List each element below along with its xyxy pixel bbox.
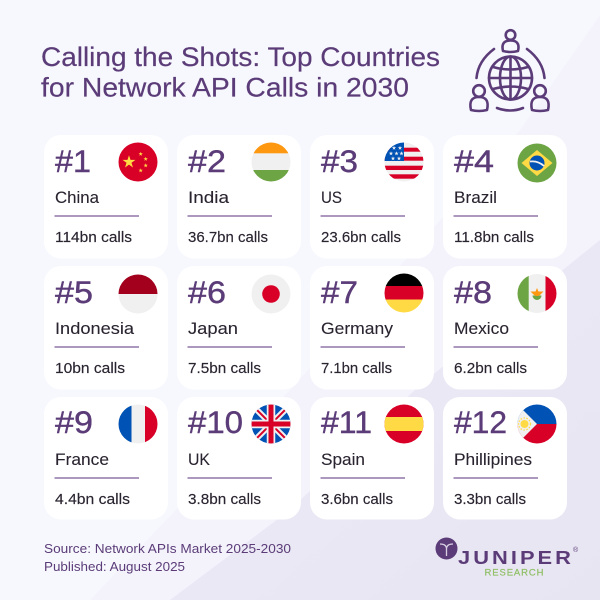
panel: Philippines <box>443 397 567 520</box>
flag: Mexico <box>517 274 558 314</box>
country name: Spain <box>321 451 365 469</box>
rank: #1 <box>55 143 91 179</box>
calls value: 11.8bn calls <box>454 230 534 246</box>
calls value: 4.4bn calls <box>55 492 130 508</box>
panel: US <box>320 142 434 258</box>
calls value: 23.6bn calls <box>321 230 401 246</box>
rank: #5 <box>55 274 93 310</box>
flag: France <box>118 404 158 444</box>
logo: Juniper Research: RESEARCH <box>484 568 544 578</box>
logo: Juniper Research: ® <box>573 546 579 554</box>
calls value: 7.1bn calls <box>321 361 392 377</box>
rank: #7 <box>321 274 358 310</box>
calls value: 7.5bn calls <box>188 361 261 377</box>
rank: #12 <box>454 404 507 440</box>
panel: France <box>54 404 158 504</box>
rank: #10 <box>188 404 243 440</box>
flag: China <box>118 142 158 182</box>
source note <box>44 541 291 574</box>
country name: France <box>55 451 109 469</box>
flag: Germany <box>384 273 424 314</box>
calls value: 3.6bn calls <box>321 492 393 508</box>
source note: Published: August 2025 <box>44 559 185 574</box>
rank: #8 <box>454 274 492 310</box>
country name: Mexico <box>454 320 509 338</box>
country name: Brazil <box>454 189 497 207</box>
flag: Brazil <box>517 143 557 183</box>
panel: Germany <box>310 266 434 390</box>
calls value: 6.2bn calls <box>454 361 527 377</box>
flag: UK <box>251 404 291 444</box>
country name: Germany <box>321 320 394 338</box>
calls value: 114bn calls <box>55 230 132 246</box>
calls value: 10bn calls <box>55 361 125 377</box>
country name: US <box>321 189 342 207</box>
calls value: 3.8bn calls <box>188 492 261 508</box>
panel: UK <box>177 397 301 520</box>
rank: #11 <box>321 404 372 440</box>
flag: Spain <box>384 404 424 444</box>
calls value: 36.7bn calls <box>188 230 268 246</box>
panel: Brazil <box>443 135 567 258</box>
flag: Japan <box>251 274 291 314</box>
flag: Indonesia <box>118 274 158 314</box>
rank: #2 <box>188 143 226 179</box>
icon: people around a globe <box>470 30 549 111</box>
rank: #4 <box>454 143 494 179</box>
logo: Juniper Research: JUNIPER <box>458 548 574 568</box>
panel: China <box>54 142 158 242</box>
country name: Indonesia <box>55 320 135 338</box>
panel: Spain <box>310 397 434 520</box>
source note: Source: Network APIs Market 2025-2030 <box>44 541 291 556</box>
country name: Japan <box>188 320 238 338</box>
panel: Indonesia <box>54 274 158 374</box>
flag: India <box>251 142 291 182</box>
country name: India <box>188 189 230 207</box>
rank: #3 <box>321 143 358 179</box>
panel: Japan <box>188 274 300 387</box>
flag: US <box>384 142 424 182</box>
panel: Mexico <box>443 266 567 390</box>
logo: Juniper Research <box>436 538 579 578</box>
title: for Network API Calls in 2030 <box>41 72 409 102</box>
rank: #6 <box>188 274 226 310</box>
title <box>41 42 440 102</box>
flag: Philippines <box>517 404 557 444</box>
panel: India <box>188 142 290 242</box>
country name: Phillipines <box>454 451 532 469</box>
rank: #9 <box>55 404 93 440</box>
calls value: 3.3bn calls <box>454 492 526 508</box>
country name: China <box>55 189 100 207</box>
country name: UK <box>188 451 210 469</box>
title: Calling the Shots: Top Countries <box>41 42 440 72</box>
